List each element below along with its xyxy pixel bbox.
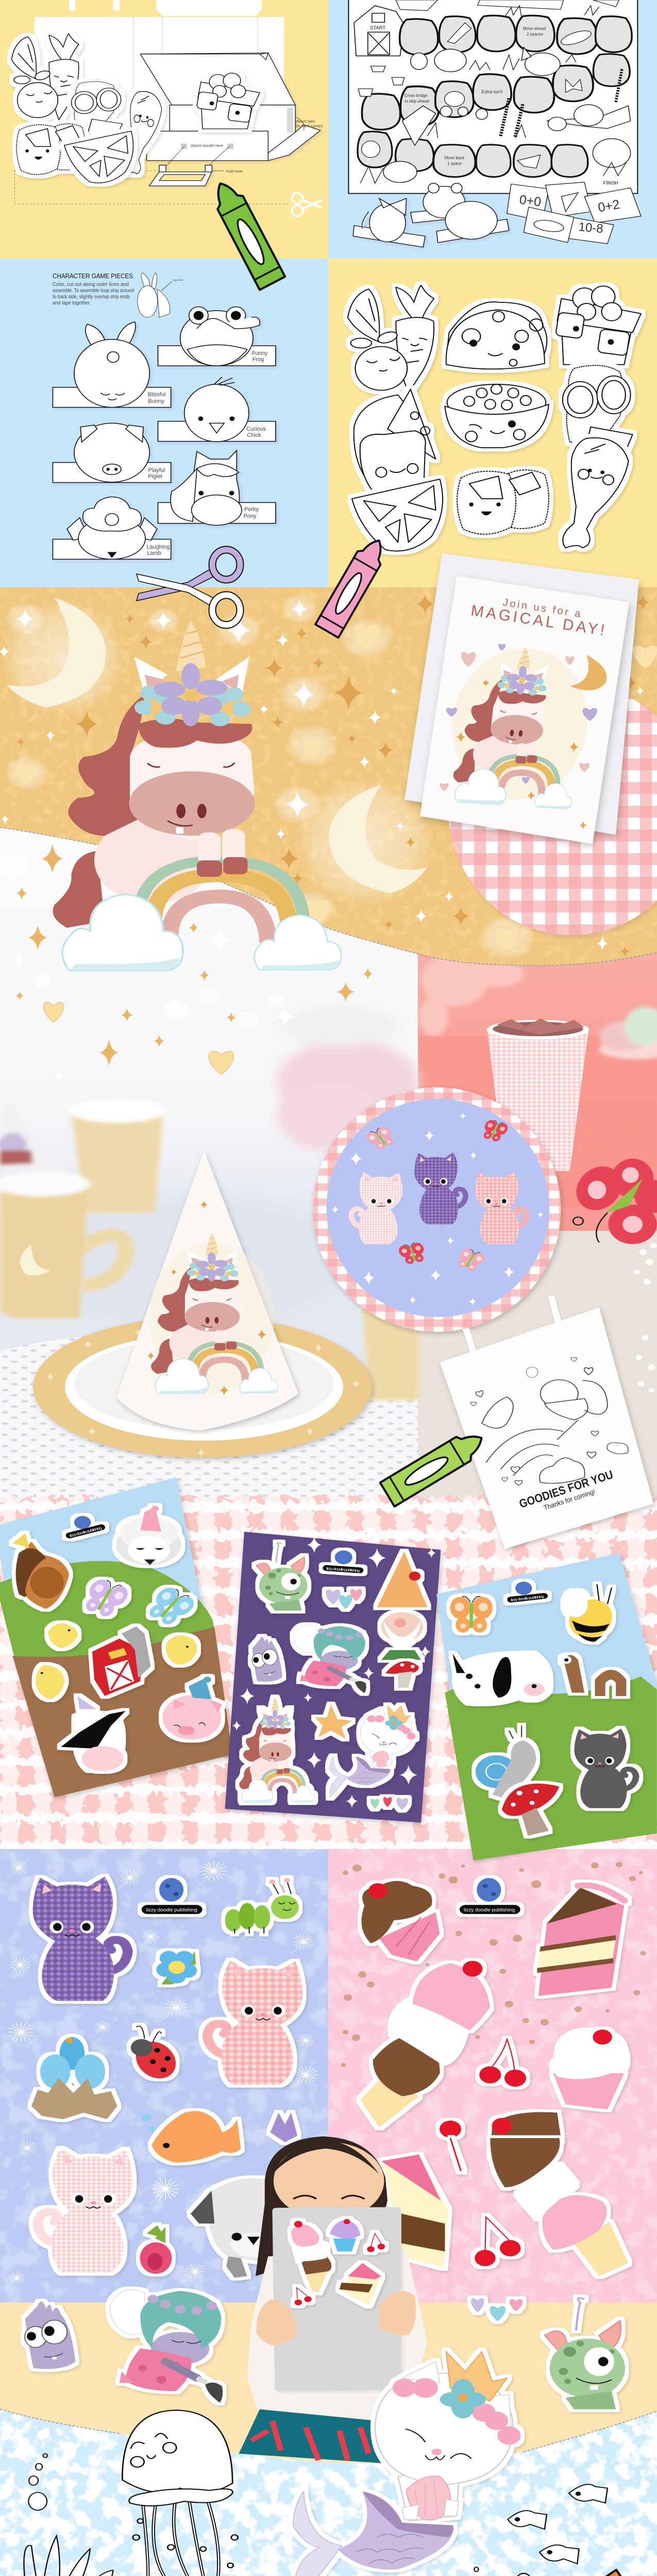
background: lower-left blue panel bbox=[0, 259, 328, 588]
character piece: piglet bbox=[53, 423, 171, 483]
sticker: purple monster bbox=[252, 1637, 282, 1682]
bag small hearts bbox=[470, 1358, 628, 1485]
sticker: dog bbox=[452, 1653, 549, 1703]
bag caption: Thanks for coming! bbox=[543, 1487, 596, 1512]
tablet cherry sticker bbox=[367, 2233, 385, 2252]
sticker: rice treat small bbox=[72, 81, 123, 142]
icon: white scissors bbox=[292, 193, 322, 216]
board labels: 0+2 bbox=[597, 197, 621, 215]
closed eyes bbox=[293, 2196, 364, 2199]
ocean mottled water bbox=[0, 2409, 657, 2576]
section title and instructions: assemble. To assemble loop strip around bbox=[53, 288, 134, 294]
tablet small cherry sticker bbox=[295, 2287, 312, 2306]
sticker: pale pink cat bbox=[38, 2148, 133, 2273]
character piece: frog bbox=[158, 307, 276, 366]
panel: party hat table scene bbox=[0, 1099, 419, 1499]
panel: printable board game bbox=[348, 0, 641, 247]
box assembly labels bbox=[191, 119, 323, 174]
bag logo bbox=[526, 1367, 538, 1378]
mermaid cat character bbox=[293, 2352, 521, 2576]
sticker: cherry bbox=[440, 2121, 463, 2172]
sticker: caterpillar bbox=[225, 1878, 299, 1934]
plate rim sparkles bbox=[46, 1328, 360, 1458]
hair bbox=[256, 2137, 388, 2276]
silver tablet bbox=[272, 2207, 401, 2391]
patterned skirt bbox=[239, 2409, 388, 2464]
board labels: 0+0 bbox=[518, 193, 542, 210]
sticker: cherries bbox=[479, 2039, 526, 2087]
sticker: butterfly orange bbox=[450, 1597, 493, 1633]
table surface bbox=[418, 1036, 657, 1207]
plate fine sparkles bbox=[332, 1113, 543, 1306]
character name labels: Piglet bbox=[148, 473, 162, 480]
monster hat bbox=[465, 2573, 545, 2576]
panel: gingham plate bbox=[448, 683, 657, 935]
seaweed bbox=[19, 2536, 184, 2576]
food sticker: radish and carrot bbox=[348, 285, 434, 393]
character name labels: Blissful bbox=[148, 392, 165, 398]
gingham paper cup bbox=[487, 1019, 589, 1171]
sticker: hearts bbox=[471, 2298, 523, 2321]
mini unicorn on card bbox=[440, 642, 607, 829]
blurred yellow cups bbox=[0, 1099, 419, 1400]
board labels: FINISH bbox=[603, 180, 618, 185]
sticker: orange slice small bbox=[64, 131, 133, 183]
character name labels: Bunny bbox=[148, 398, 164, 404]
sheet speckle bbox=[232, 1537, 436, 1808]
sticker: chick right bbox=[165, 1635, 197, 1665]
white sparkle bursts on photo bbox=[4, 855, 294, 1081]
panel: seabed and monster bbox=[30, 2573, 657, 2576]
section title and instructions: tape here bbox=[173, 279, 183, 281]
sticker: ladybug bbox=[128, 2026, 183, 2083]
character piece: pony bbox=[158, 450, 276, 525]
sticker: butterfly lavender bbox=[79, 1577, 132, 1620]
sticker: dog bbox=[191, 2178, 281, 2278]
starry confetti bbox=[575, 1124, 648, 1157]
handle guide lines bbox=[167, 117, 304, 171]
moon left bbox=[0, 598, 126, 717]
board labels: Move back bbox=[445, 156, 465, 160]
board scenery animals bbox=[383, 47, 631, 182]
board labels: Cross bridge bbox=[404, 93, 428, 98]
plate center bbox=[326, 1099, 549, 1317]
photo sparkles over white bbox=[15, 844, 373, 1066]
background: coral photo backdrop bbox=[418, 927, 657, 1231]
sticker: purple cat bbox=[32, 1877, 128, 2001]
sticker: chocolate ice cream bbox=[490, 2112, 561, 2188]
cup moon mark bbox=[20, 1244, 50, 1276]
cat purple bbox=[414, 1153, 466, 1224]
sticker: bubbles bbox=[142, 2114, 155, 2132]
panel: blurred left table scene bbox=[0, 852, 419, 1151]
sticker: ice cream lower bbox=[490, 2138, 629, 2276]
sticker: chick top bbox=[48, 1623, 78, 1649]
pale hearts bbox=[15, 625, 657, 951]
board labels: to skip ahead bbox=[405, 99, 429, 104]
board labels bbox=[370, 25, 621, 236]
box assembly labels: Attach tabs bbox=[296, 119, 315, 124]
character name labels: Funny bbox=[252, 350, 268, 357]
food sticker: taco bbox=[446, 302, 547, 369]
sticker: rose bbox=[140, 2225, 172, 2274]
background: photo party table bbox=[0, 804, 418, 1499]
unicorn illustration bbox=[53, 620, 341, 971]
sticker: grey cat bbox=[574, 1728, 636, 1808]
lace doily bbox=[0, 1336, 418, 1499]
panel: farm sticker sheet bbox=[0, 1478, 232, 1798]
ocean white panel bbox=[0, 2409, 657, 2576]
sticker: small hearts bbox=[370, 1797, 408, 1810]
sticker: logo bbox=[507, 1582, 548, 1603]
sticker: publisher logo: lizzy doodle publishing bbox=[146, 1907, 197, 1913]
panel: coral party photo bbox=[418, 954, 657, 1207]
sprinkle dots bbox=[341, 1862, 646, 2067]
bag clothespins bbox=[462, 1295, 562, 1361]
sheet paper purple bbox=[225, 1532, 441, 1823]
sticker: lamb bbox=[116, 1506, 181, 1565]
sticker: drumstick small bbox=[126, 92, 162, 174]
character name labels: Laughing bbox=[146, 544, 170, 550]
food sticker: cup with glasses bbox=[555, 286, 641, 365]
sticker: green monster bbox=[545, 2298, 625, 2409]
sticker: chick left bbox=[36, 1665, 65, 1699]
food sticker: drumstick bbox=[563, 438, 629, 548]
food sticker: cereal bowl bbox=[445, 384, 549, 448]
board labels: START bbox=[370, 25, 385, 31]
hat sparkles bbox=[147, 1201, 266, 1396]
dandelions bbox=[5, 1860, 318, 2089]
box assembly labels: Attach handle here bbox=[191, 143, 223, 148]
icon: green crayon bbox=[208, 177, 285, 290]
icon: orange crayon bbox=[522, 2570, 632, 2576]
board labels: 2 spaces bbox=[527, 32, 543, 37]
sheet grass bbox=[445, 1676, 657, 1860]
white sparkles bbox=[0, 600, 644, 950]
icon: pink crayon bbox=[315, 534, 391, 638]
bubbles right bbox=[354, 2567, 478, 2576]
card headline: MAGICAL DAY! bbox=[470, 602, 606, 639]
cat pink bbox=[475, 1172, 527, 1244]
sticker: worm bbox=[561, 1655, 626, 1696]
hat unicorn bbox=[149, 1233, 278, 1394]
assembled box drawing bbox=[140, 53, 321, 186]
plate butterflies bbox=[364, 1118, 510, 1273]
white shirt bbox=[247, 2250, 427, 2427]
panel: big purple plate with cats bbox=[313, 1087, 561, 1332]
sticker: horse bbox=[12, 1533, 69, 1609]
bag coloring drawing bbox=[482, 1380, 608, 1483]
sticker: logo: lizzy doodle publishing bbox=[326, 1567, 360, 1573]
small blurred party hat bbox=[0, 1101, 48, 1170]
bangs bbox=[272, 2140, 379, 2174]
sheet soil bbox=[12, 1627, 232, 1798]
barn start bbox=[354, 6, 405, 56]
board labels: 10-8 bbox=[578, 220, 604, 236]
sticker: logo bbox=[323, 1550, 364, 1573]
section title and instructions bbox=[53, 273, 183, 306]
sticker: logo: lizzy doodle publishing bbox=[69, 1526, 103, 1538]
small fish bbox=[508, 2484, 608, 2564]
food sticker: bread and cheese bbox=[354, 389, 436, 491]
panel: purple sticker sheet bbox=[225, 1532, 441, 1823]
board labels: Move ahead bbox=[523, 26, 546, 31]
panel: paper suitcase template bbox=[11, 0, 323, 216]
sticker: logo: lizzy doodle publishing bbox=[511, 1595, 545, 1602]
sticker: cake slice bbox=[537, 1885, 624, 1996]
section title and instructions: Color, cut out along outer lines and bbox=[53, 282, 129, 287]
food sticker: sushi bbox=[457, 470, 549, 534]
cat white bbox=[351, 1172, 402, 1244]
sticker: logo bbox=[65, 1516, 106, 1539]
character name labels bbox=[146, 350, 268, 556]
tablet cupcake sticker bbox=[330, 2219, 360, 2251]
envelope behind card bbox=[405, 553, 639, 835]
sticker: mermaid cat bbox=[329, 1706, 416, 1798]
pink texture bbox=[328, 1849, 657, 2302]
board labels: Extra turn! bbox=[481, 89, 503, 94]
section title and instructions: to back side, slightly overlap strip ends bbox=[53, 294, 130, 300]
sticker: triple ice cream bbox=[360, 1961, 490, 2127]
sticker: blue flower bbox=[156, 1951, 197, 1985]
top game cards bbox=[396, 0, 619, 11]
blurred macarons bbox=[599, 1007, 657, 1059]
flat paper template bbox=[35, 0, 284, 161]
food sticker: orange slice bbox=[352, 479, 443, 551]
sticker: green monster bbox=[256, 1543, 308, 1611]
sticker: publisher logo bbox=[142, 1878, 203, 1914]
panel: periwinkle cat stickers bbox=[5, 1860, 318, 2163]
sticker: barn bbox=[92, 1626, 151, 1696]
gold sparkles bbox=[17, 594, 649, 957]
sticker: cherries lower bbox=[475, 2217, 521, 2266]
board plants bbox=[358, 6, 626, 183]
sticker: cherry stem bbox=[450, 2138, 461, 2171]
sheet paper sky bbox=[436, 1553, 657, 1860]
girl hands bbox=[256, 2291, 416, 2345]
party hat bbox=[116, 1150, 298, 1431]
sticker: mushroom red bbox=[502, 1784, 559, 1836]
sticker: chocolate cupcake bbox=[361, 1881, 440, 1961]
panel: character game pieces bbox=[53, 273, 276, 559]
game piece: pony bbox=[353, 198, 425, 247]
wave dashed edge bbox=[0, 827, 657, 965]
sticker: unicorn bbox=[239, 1697, 314, 1802]
jellyfish bbox=[122, 2410, 238, 2576]
sticker: radish and carrot small bbox=[11, 33, 79, 120]
cats plate rim bbox=[313, 1087, 561, 1332]
character name labels: Playful bbox=[148, 467, 165, 473]
icon: light green crayon bbox=[380, 1426, 488, 1506]
tablet cake sticker bbox=[340, 2263, 381, 2306]
character name labels: Chick bbox=[247, 432, 261, 438]
card face bbox=[420, 576, 629, 844]
character name labels: Lamb bbox=[147, 550, 161, 556]
background: sand starry panel bbox=[0, 587, 657, 965]
sheet paper bbox=[0, 1478, 232, 1798]
peach wave dashed edge bbox=[0, 2409, 657, 2452]
sheet hill bbox=[0, 1561, 232, 1798]
blurred paper flower bbox=[419, 954, 524, 1036]
sticker: purple monster bbox=[25, 2301, 75, 2369]
blurred cake bbox=[277, 1007, 419, 1151]
gold rimmed plate bbox=[33, 1316, 372, 1458]
sticker: bee bbox=[562, 1584, 619, 1643]
table blur bbox=[29, 1193, 348, 1331]
sticker: mushroom bbox=[385, 1661, 419, 1688]
food sticker: rice treat with glasses bbox=[563, 365, 633, 465]
sticker: publisher logo bbox=[460, 1878, 520, 1914]
sticker: publisher logo: lizzy doodle publishing bbox=[464, 1907, 515, 1913]
sticker: goldfish bbox=[151, 2111, 241, 2163]
game board sheet bbox=[348, 0, 637, 194]
moon right bbox=[293, 776, 436, 908]
bag caption: GOODIES FOR YOU bbox=[517, 1468, 615, 1511]
background: peach lower panel bbox=[0, 2302, 657, 2472]
sticker: fairy bbox=[294, 1625, 366, 1693]
sticker: purple tulip bbox=[270, 2113, 297, 2142]
background: top-left yellow panel bbox=[0, 0, 328, 259]
bubbles left bbox=[28, 2453, 257, 2576]
game cards bbox=[507, 182, 641, 244]
game path stones bbox=[358, 15, 632, 177]
sticker: gnome bbox=[377, 1551, 427, 1660]
section title and instructions: CHARACTER GAME PIECES bbox=[53, 273, 133, 280]
face bbox=[274, 2142, 384, 2219]
panel: girl with tablet photo bbox=[239, 2137, 427, 2464]
background: pink sticker panel bbox=[328, 1849, 657, 2302]
instruction bunny diagram bbox=[138, 273, 172, 317]
section title and instructions: and tape together. bbox=[53, 300, 91, 306]
panel: sweet treat stickers bbox=[341, 1862, 646, 2188]
dandelions lower bbox=[6, 2141, 205, 2287]
character name labels: Curious bbox=[246, 426, 266, 432]
sticker: cake behind girl bbox=[381, 2155, 448, 2268]
card headline: Join us for a bbox=[502, 597, 582, 620]
sticker: cup with glasses small bbox=[196, 73, 260, 129]
panel: invitation card bbox=[405, 553, 639, 844]
stone icons bbox=[362, 23, 593, 168]
box assembly labels: Fold here bbox=[226, 169, 243, 174]
sticker: hearts bbox=[326, 1589, 362, 1609]
dashed cut line bbox=[14, 170, 289, 204]
character piece: chick bbox=[158, 377, 276, 442]
panel: bug sticker sheet bbox=[436, 1553, 657, 1860]
baby's breath bbox=[634, 1243, 657, 1393]
panel: ocean coloring page bbox=[19, 2352, 608, 2576]
panel: goodie bag corner bbox=[440, 1124, 657, 1549]
periwinkle texture bbox=[0, 1849, 328, 2302]
sticker: pig bbox=[162, 1676, 222, 1740]
icon: lavender scissors bbox=[137, 550, 240, 625]
panel: unicorn stars scene bbox=[0, 594, 657, 1081]
character name labels: Perky bbox=[244, 506, 259, 513]
panel: lower stickers row bbox=[6, 2138, 629, 2409]
background: periwinkle sticker panel bbox=[0, 1849, 328, 2302]
red butterfly bbox=[569, 1159, 657, 1244]
sticker: pink cat bbox=[207, 1960, 302, 2084]
background: lower-right yellow panel bbox=[328, 259, 657, 588]
sticker: fairy bbox=[110, 2290, 223, 2403]
sticker: white cupcake bbox=[553, 2029, 627, 2109]
game piece: lamb bbox=[436, 201, 509, 243]
sticker: birds in nest bbox=[31, 2037, 117, 2119]
tablet ice cream sticker bbox=[291, 2221, 331, 2293]
background: gingham sticker table bbox=[0, 1497, 657, 1853]
sticker: star bbox=[315, 1704, 352, 1739]
sticker: butterfly blue bbox=[142, 1584, 198, 1629]
character name labels: Pony bbox=[243, 513, 257, 519]
sticker: sushi small bbox=[16, 124, 85, 175]
character piece: lamb bbox=[53, 497, 171, 559]
character piece: bunny bbox=[53, 322, 171, 408]
bokeh spots bbox=[0, 852, 285, 1028]
character name labels: Frog bbox=[252, 357, 264, 363]
sand mottled texture bbox=[0, 587, 657, 969]
goodie bag bbox=[440, 1308, 653, 1549]
sticker: cow bbox=[61, 1696, 126, 1771]
board labels: 1 space bbox=[447, 161, 462, 166]
box assembly labels: (in each corner) bbox=[296, 124, 323, 128]
photo hearts bbox=[43, 1002, 233, 1075]
background: top-right blue panel bbox=[328, 0, 657, 259]
panel: food coloring stickers bbox=[348, 285, 641, 551]
background: wooden surface bbox=[418, 1231, 657, 1499]
sparkle halos bbox=[4, 594, 536, 961]
sticker: snail bbox=[476, 1725, 536, 1798]
game piece: frog bbox=[411, 183, 466, 223]
